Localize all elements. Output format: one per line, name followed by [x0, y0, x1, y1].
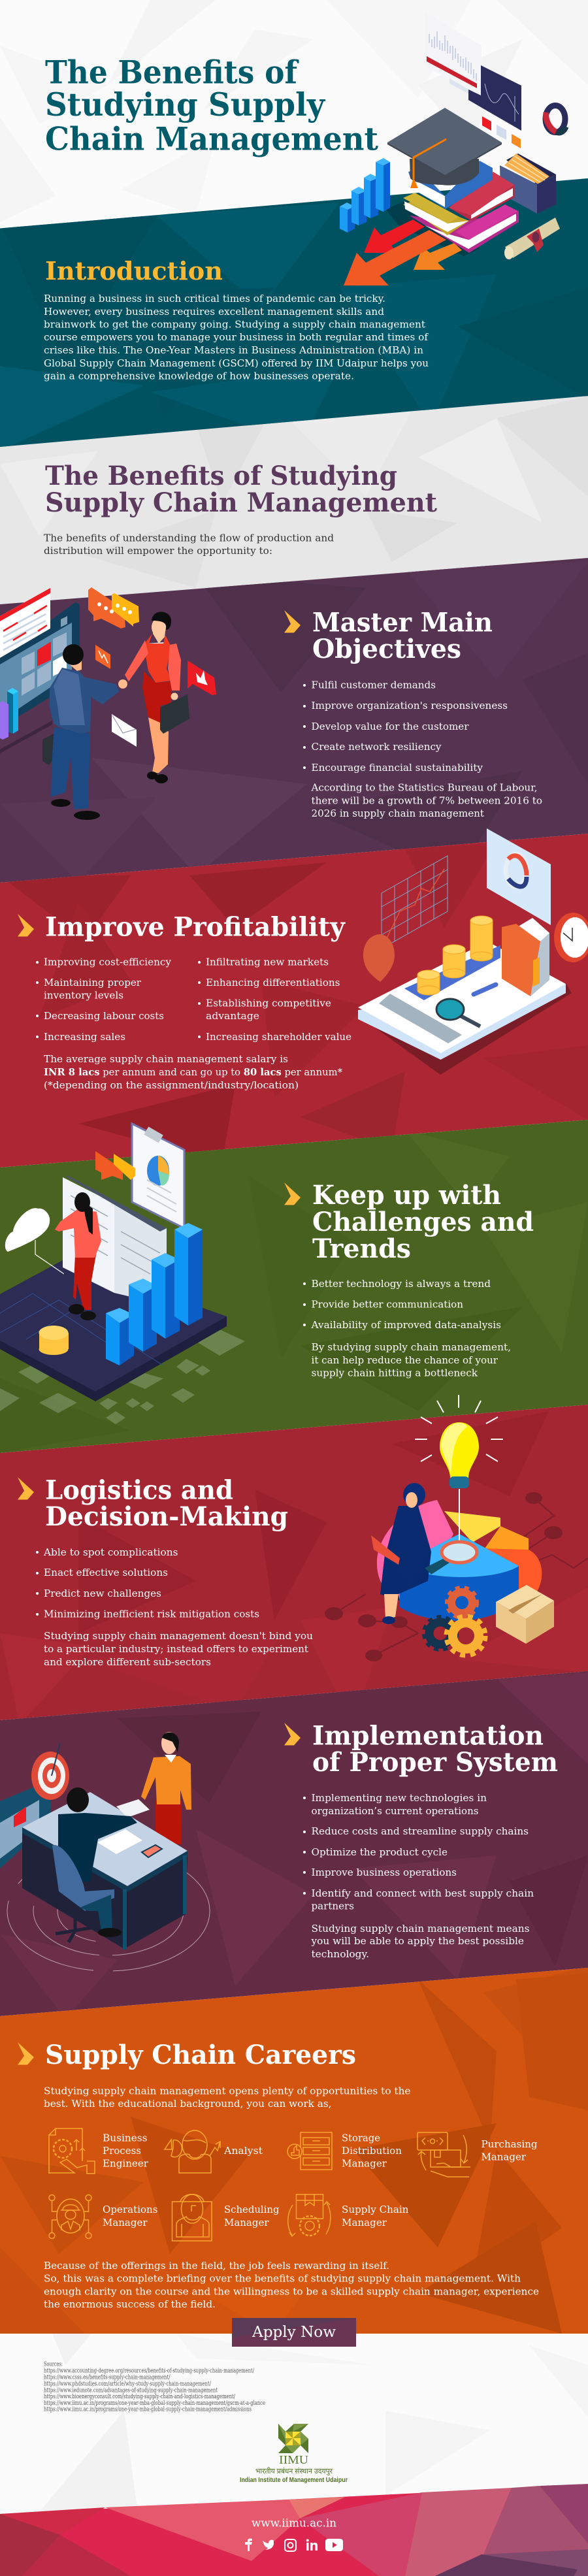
section: implementation of proper system — [284, 1721, 558, 1960]
career: scheduling manager: Scheduling — [224, 2205, 280, 2215]
desk — [22, 1792, 188, 1949]
heading — [312, 608, 493, 664]
floating document — [0, 588, 50, 658]
blue bar chart — [340, 158, 390, 233]
coin stack — [39, 1326, 69, 1355]
career: supply chain manager: Supply Chain — [342, 2205, 409, 2215]
panel: teal introduction background — [0, 176, 588, 451]
magnifier — [425, 1542, 477, 1574]
left bullet list: Improving cost-efficiency — [44, 958, 172, 968]
heading: Keep up with — [312, 1180, 501, 1211]
chevron icon — [284, 610, 301, 632]
chart panel — [424, 11, 482, 98]
section: supply chain careers — [18, 2040, 539, 2310]
introduction text: gain a comprehensive knowledge of how businesses operate. — [44, 371, 354, 382]
left bullet list — [36, 958, 172, 1043]
bullet list — [303, 1279, 501, 1331]
sources list: Sources: — [44, 2361, 63, 2368]
panel: plum implementation background — [0, 1666, 588, 2019]
icon: linkedin — [306, 2539, 318, 2551]
closing statement: So, this was a complete briefing over the benefits of studying supply chain management. With — [44, 2274, 521, 2284]
bullet list: Reduce costs and streamline supply chains — [311, 1827, 529, 1837]
sources list: https://www.iimu.ac.in/programs/one-year-mba-global-supply-chain-management/admissions — [44, 2407, 252, 2413]
introduction text — [44, 294, 429, 382]
heading: Logistics and — [45, 1475, 233, 1505]
bullet list: Identify and connect with best supply chain — [311, 1889, 534, 1899]
woman at book — [55, 1192, 101, 1320]
illustration: office desk meeting — [0, 1732, 210, 1971]
icon: instagram — [285, 2539, 296, 2551]
career: business process engineer — [49, 2128, 148, 2174]
career: storage distribution manager: Manager — [342, 2159, 387, 2169]
icon: facebook — [245, 2539, 252, 2551]
businessman — [42, 644, 127, 820]
career: business process engineer: Business — [103, 2134, 148, 2144]
left bullet list: Increasing sales — [44, 1032, 125, 1043]
logo mark — [278, 2424, 308, 2453]
growth statement — [310, 783, 542, 819]
handed document — [116, 1799, 150, 1818]
coin stacks — [417, 916, 493, 995]
heading: of Proper System — [312, 1747, 558, 1778]
salary statement: (*depending on the assignment/industry/location) — [44, 1081, 299, 1091]
bullet list: Optimize the product cycle — [311, 1848, 448, 1858]
social icons — [245, 2539, 343, 2551]
bullet list: Predict new challenges — [44, 1589, 161, 1599]
bottleneck statement: it can help reduce the chance of your — [311, 1356, 498, 1366]
heading: Objectives — [312, 634, 461, 664]
careers intro — [44, 2087, 410, 2110]
panel: red profitability background — [0, 830, 588, 1176]
folder box — [500, 154, 556, 214]
apply now button — [232, 2318, 356, 2347]
sources list: https://www.bioenergyconsult.com/studying-supply-chain-and-logistics-management/ — [44, 2394, 236, 2400]
career: business process engineer: Process — [103, 2146, 141, 2157]
sources list: https://www.csss.es/benefits-supply-chain-management/ — [44, 2374, 171, 2381]
sources list: https://www.phdstudies.com/article/why-study-supply-chain-management/ — [44, 2381, 212, 2387]
pie chart — [377, 1500, 542, 1621]
career: supply chain manager: Manager — [342, 2218, 387, 2228]
icon: analyst — [165, 2130, 220, 2173]
sub-sectors statement: and explore different sub-sectors — [44, 1657, 211, 1668]
panel: white footer background — [0, 2334, 588, 2514]
right bullet list: Establishing competitive — [206, 998, 331, 1009]
illustration: data analysis platform — [0, 1124, 245, 1424]
IIMU logo: IIMU — [279, 2453, 308, 2466]
career: purchasing manager — [417, 2132, 537, 2177]
object shadows — [385, 196, 480, 256]
benefits heading: Supply Chain Management — [45, 487, 438, 518]
icon: youtube — [325, 2539, 343, 2551]
bullet list — [303, 681, 508, 774]
target — [31, 1743, 69, 1800]
seated man and chair — [52, 1787, 137, 1942]
career: storage distribution manager: Distribution — [342, 2146, 402, 2157]
closing statement: enough clarity on the course and the willingness to be a skilled supply chain manager, experience — [44, 2287, 539, 2297]
bullet list: Improve organization's responsiveness — [311, 701, 508, 711]
introduction text: brainwork to get the company going. Studying a supply chain management — [44, 320, 425, 331]
benefits intro text — [44, 533, 334, 557]
panel: green trends background — [0, 1117, 588, 1457]
like bubble — [188, 660, 216, 695]
bullet list — [303, 1793, 534, 1912]
introduction text: course empowers you to manage your business in both regular and times of — [44, 333, 429, 343]
careers intro: best. With the educational background, you can work as, — [44, 2099, 332, 2110]
panel: light grey benefits background — [0, 396, 588, 608]
introduction text: However, every business requires excellent management skills and — [44, 307, 384, 318]
introduction heading: Introduction — [45, 256, 223, 285]
sub-sectors statement — [44, 1631, 313, 1668]
icon: document gear — [49, 2128, 95, 2174]
heading: Supply Chain Careers — [45, 2040, 356, 2070]
sub-sectors statement: to a particular industry; instead offers to experiment — [44, 1644, 308, 1655]
panel: purple objectives background — [0, 555, 588, 889]
careers intro: Studying supply chain management opens plenty of opportunities to the — [44, 2087, 410, 2097]
bullet list: Encourage financial sustainability — [311, 763, 483, 774]
section: master main objectives — [284, 608, 542, 819]
heading — [312, 1721, 558, 1778]
title: Studying Supply — [45, 86, 325, 123]
left bullet list: Maintaining proper — [44, 978, 141, 988]
benefits heading: The Benefits of Studying — [45, 461, 397, 491]
small chart tile — [95, 645, 110, 669]
light rays — [415, 1395, 503, 1461]
growth statement: According to the Statistics Bureau of Labour, — [310, 783, 537, 793]
screen — [0, 1780, 50, 1868]
career: analyst — [165, 2130, 263, 2173]
display board — [0, 602, 80, 753]
bullet list: Availability of improved data-analysis — [310, 1320, 501, 1331]
binders — [502, 918, 549, 996]
standing man — [141, 1732, 191, 1844]
IIMU logo: भारतीय प्रबंधन संस्थान उदयपुर — [255, 2467, 333, 2475]
heading: Trends — [312, 1233, 411, 1264]
heading: Challenges and — [312, 1207, 534, 1237]
bullet list: Enact effective solutions — [44, 1568, 168, 1578]
heading — [45, 1475, 288, 1532]
heading — [312, 1180, 534, 1264]
donut panel — [487, 828, 551, 925]
closing statement: Because of the offerings in the field, the job feels rewarding in itself. — [44, 2261, 389, 2272]
benefits intro text: The benefits of understanding the flow of production and — [44, 533, 334, 544]
bullet list: organization’s current operations — [311, 1806, 478, 1817]
icon: package gear — [288, 2194, 331, 2236]
career: storage distribution manager: Storage — [342, 2134, 380, 2144]
section: keep up with challenges and trends — [284, 1180, 534, 1378]
magnifier — [436, 999, 480, 1026]
page background: white top panel — [0, 0, 588, 457]
career: scheduling manager: Manager — [224, 2218, 269, 2228]
heading: Improve Profitability — [45, 912, 346, 942]
title: The Benefits of — [45, 54, 299, 91]
closing statement — [44, 2261, 539, 2310]
career: operations manager — [49, 2195, 158, 2238]
light bulb — [440, 1422, 479, 1488]
bullet list: Fulfil customer demands — [311, 681, 436, 691]
salary statement — [44, 1054, 343, 1091]
sources list: https://www.iedunote.com/advantages-of-studying-supply-chain-management — [44, 2387, 218, 2394]
technology statement: technology. — [311, 1949, 369, 1960]
right bullet list: Enhancing differentiations — [206, 978, 340, 988]
career: business process engineer: Engineer — [103, 2159, 148, 2169]
chevron icon — [284, 1182, 301, 1205]
right bullet list: advantage — [206, 1011, 259, 1022]
growth statement: 2026 in supply chain management — [311, 809, 484, 819]
closing statement: the enormous success of the field. — [44, 2300, 216, 2310]
platform — [0, 1260, 227, 1401]
career: operations manager: Manager — [103, 2218, 148, 2228]
seated woman — [371, 1483, 431, 1624]
navy line chart — [468, 65, 521, 131]
benefits heading — [45, 461, 438, 518]
platform — [358, 941, 572, 1075]
bullet list: Better technology is always a trend — [311, 1279, 491, 1290]
circuit traces — [325, 1493, 588, 1661]
IIMU logo — [240, 2424, 348, 2484]
blue bars — [106, 1223, 203, 1365]
technology statement: Studying supply chain management means — [311, 1924, 529, 1934]
donut icon — [546, 106, 566, 133]
illustration: profitability platform — [358, 828, 588, 1075]
right bullet list: Increasing shareholder value — [206, 1032, 351, 1043]
sub-sectors statement: Studying supply chain management doesn't bind you — [44, 1631, 313, 1642]
chevron icon — [18, 914, 34, 937]
website address: www.iimu.ac.in — [252, 2517, 336, 2530]
panel: coloured footer background — [0, 2484, 588, 2576]
bullet list: Minimizing inefficient risk mitigation costs — [44, 1610, 259, 1620]
bullet list: Improve business operations — [311, 1868, 457, 1878]
bullet list: Able to spot complications — [43, 1548, 178, 1558]
stacked books — [403, 161, 519, 253]
section: logistics and decision-making — [18, 1475, 313, 1668]
heading: Decision-Making — [45, 1501, 288, 1532]
icon: purchase exchange — [417, 2132, 470, 2177]
bottleneck statement — [311, 1343, 511, 1378]
title: Chain Management — [45, 120, 378, 158]
benefits intro text: distribution will empower the opportunity to: — [44, 546, 272, 557]
left bullet list: inventory levels — [44, 990, 123, 1001]
bottleneck statement: By studying supply chain management, — [311, 1343, 511, 1353]
arrows — [344, 220, 462, 285]
bullet list: partners — [311, 1901, 354, 1912]
career: operations manager: Operations — [103, 2205, 158, 2215]
dashboard tiles — [482, 116, 521, 148]
bottleneck statement: supply chain hitting a bottleneck — [311, 1368, 478, 1378]
bullet list: Provide better communication — [311, 1300, 463, 1311]
left bullet list: Decreasing labour costs — [44, 1011, 164, 1022]
floor rings — [7, 1851, 210, 1971]
chat bubbles — [95, 1151, 135, 1180]
businesswoman — [125, 611, 189, 783]
gears — [424, 1588, 485, 1655]
right bullet list: Infiltrating new markets — [206, 958, 329, 968]
salary statement: The average supply chain management salary is — [44, 1054, 288, 1065]
career: scheduling manager — [172, 2194, 280, 2241]
heading: Implementation — [312, 1721, 544, 1751]
sources list: https://www.iimu.ac.in/programs/one-year-mba-global-supply-chain-management/gscm-at-a-glance — [44, 2400, 265, 2407]
technology statement: you will be able to apply the best possible — [310, 1936, 524, 1947]
heading: Master Main — [312, 608, 493, 638]
section: improve profitability — [18, 912, 351, 1091]
salary statement: INR 8 lacs per annum and can go up to 80 lacs per annum* — [44, 1067, 343, 1078]
panel: red decision-making background — [0, 1401, 588, 1725]
growth statement: there will be a growth of 7% between 2016 to — [311, 796, 542, 806]
cloud — [5, 1208, 64, 1274]
sources list — [44, 2361, 265, 2413]
right bullet list — [198, 958, 351, 1043]
illustration: decision pie chart and bulb — [325, 1395, 588, 1661]
career: supply chain manager — [288, 2194, 409, 2236]
parcel box — [496, 1585, 554, 1644]
panel: orange careers background — [0, 1963, 588, 2336]
faded floor tiles — [0, 1329, 245, 1424]
chevron icon — [18, 2042, 34, 2064]
line graph grid — [382, 856, 448, 949]
sources list: https://www.accounting-degree.org/resources/benefits-of-studying-supply-chain-management/ — [44, 2368, 255, 2374]
chevron icon — [18, 1477, 34, 1500]
clipboard — [132, 1124, 184, 1228]
IIMU logo: Indian Institute of Management Udaipur — [240, 2476, 348, 2484]
location pin — [363, 934, 395, 982]
introduction text: crises like this. The One-Year Masters in Business Administration (MBA) in — [44, 346, 423, 356]
career: storage distribution manager — [287, 2132, 402, 2170]
technology statement — [310, 1924, 529, 1960]
diploma scroll — [504, 218, 560, 259]
icon: twitter — [263, 2540, 274, 2549]
mini bars — [0, 688, 18, 740]
bullet list: Create network resiliency — [311, 742, 442, 753]
bullet list: Develop value for the customer — [311, 722, 469, 732]
open book — [63, 1176, 167, 1305]
chat bubbles — [88, 587, 139, 628]
bullet list — [36, 1548, 259, 1620]
career: purchasing manager: Purchasing — [481, 2140, 537, 2150]
bulb stem — [459, 1489, 460, 1542]
introduction text: Running a business in such critical times of pandemic can be tricky. — [44, 294, 385, 304]
hero illustration: graduation cap, books and charts — [340, 11, 566, 285]
title — [45, 54, 378, 158]
career: purchasing manager: Manager — [481, 2152, 526, 2162]
chevron icon — [284, 1723, 301, 1746]
career: analyst: Analyst — [223, 2146, 263, 2157]
illustration: business handshake — [0, 587, 216, 820]
graduation cap — [387, 108, 502, 188]
icon: operations worker — [49, 2195, 91, 2238]
envelope — [112, 714, 137, 747]
clock — [554, 913, 588, 962]
icon: storage cabinet — [287, 2132, 332, 2170]
introduction text: Global Supply Chain Management (GSCM) offered by IIM Udaipur helps you — [44, 359, 429, 369]
bullet list: Implementing new technologies in — [311, 1793, 487, 1804]
apply now button: Apply Now — [252, 2324, 336, 2341]
icon: scheduling manager — [172, 2194, 212, 2241]
